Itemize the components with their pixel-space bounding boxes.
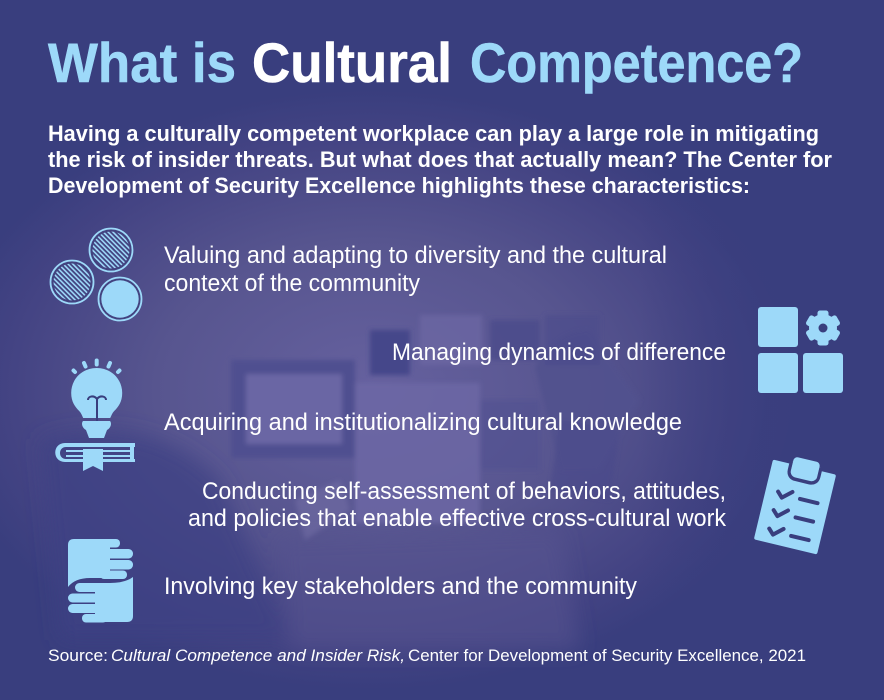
title: Competence? [470,31,803,94]
icon: light bulb on book [55,360,135,471]
text: self-assessment: and policies that enable effective cross-cultural work [188,505,727,532]
source: Source: [48,646,108,665]
icon: three circles [50,228,142,320]
text: valuing diversity: context of the community [164,270,421,297]
icon: clipboard checklist [754,452,838,554]
intro text: Having a culturally competent workplace can play a large role in mitigating [48,121,819,146]
icon: squares and gear [758,307,843,393]
intro text: Development of Security Excellence highlights these characteristics: [48,173,750,198]
intro text [48,121,832,198]
title: What is [48,31,236,94]
source: Cultural Competence and Insider Risk, [111,646,405,665]
text: self-assessment [188,478,727,532]
title [48,31,803,94]
text: valuing diversity: Valuing and adapting to diversity and the cultural [164,242,667,269]
text: acquiring knowledge: Acquiring and institutionalizing cultural knowledge [164,409,682,436]
text: valuing diversity [164,242,667,297]
title: Cultural [252,31,452,94]
source [48,646,806,665]
intro text: the risk of insider threats. But what does that actually mean? The Center for [48,147,832,172]
text: involving stakeholders: Involving key stakeholders and the community [164,573,638,600]
text: managing dynamics: Managing dynamics of difference [392,339,726,366]
source: Center for Development of Security Excellence, 2021 [408,646,806,665]
text: self-assessment: Conducting self-assessment of behaviors, attitudes, [202,478,726,505]
icon: clasped hands [68,539,133,622]
